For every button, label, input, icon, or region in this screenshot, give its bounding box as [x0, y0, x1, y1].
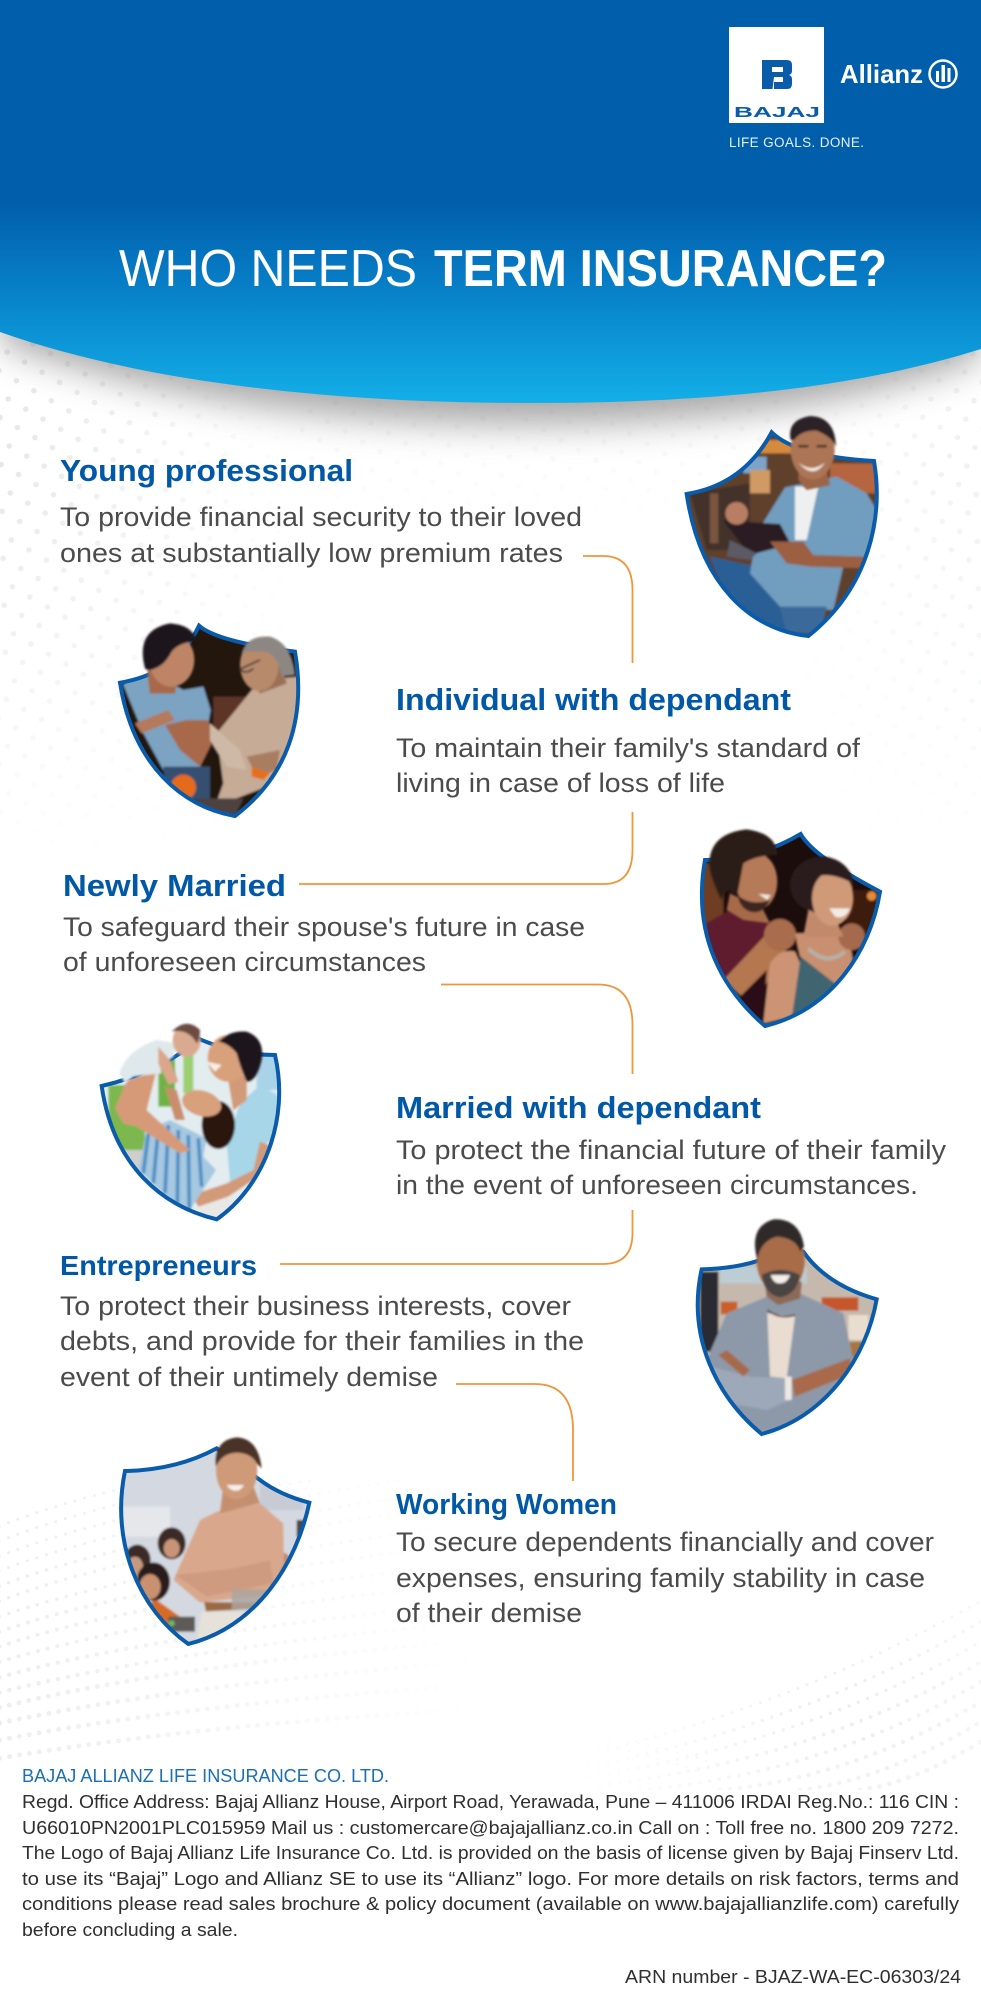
description: in the event of unforeseen circumstances. [396, 1170, 918, 1200]
description: To safeguard their spouse's future in case [63, 912, 585, 942]
section: Married with dependant [396, 1090, 947, 1200]
section: Individual with dependant [396, 682, 861, 798]
description: debts, and provide for their families in the [60, 1326, 584, 1356]
footer: ARN number: ARN number - BJAZ-WA-EC-06303/24 [625, 1967, 961, 1987]
scene background and body [700, 1255, 874, 1432]
heads [143, 623, 295, 693]
description: To secure dependents financially and cover [396, 1527, 934, 1557]
description [396, 1135, 947, 1200]
section: Newly Married: Newly Married [63, 868, 286, 903]
header panel [0, 0, 981, 403]
scene background and bodies [104, 1042, 278, 1217]
section: Newly Married [63, 868, 585, 977]
wordmark: BAJAJ: BAJAJ [734, 104, 820, 121]
description: To protect the financial future of their family [396, 1135, 947, 1165]
section: Individual with dependant: Individual with dependant [396, 682, 791, 717]
connector arrow 5 [456, 1384, 573, 1481]
title [119, 240, 887, 298]
icon: Allianz eagle roundel [930, 60, 956, 88]
photo shield: working women [117, 1437, 313, 1647]
connector arrow 2 [299, 812, 632, 884]
head [755, 1219, 805, 1305]
description [396, 733, 861, 798]
description [60, 502, 582, 568]
photo shield: entrepreneurs [693, 1219, 880, 1437]
head [216, 1437, 262, 1513]
scene background and bodies [704, 836, 878, 1024]
connector arrow 4 [280, 1210, 632, 1264]
section: Young professional [60, 453, 582, 568]
footer: legal disclaimer: Regd. Office Address: Bajaj Allianz House, Airport Road, Yerawada, Pune – 411006 IRDAI Reg.No.: 116 CIN : [22, 1792, 959, 1812]
title: TERM INSURANCE? [434, 240, 887, 298]
section: Married with dependant: Married with dependant [396, 1090, 761, 1125]
shield outline [102, 1039, 279, 1219]
connector arrow 1 [583, 556, 632, 663]
description: To maintain their family's standard of [396, 733, 861, 763]
footer: legal disclaimer: to use its “Bajaj” Logo and Allianz SE to use its “Allianz” logo. For more details on risk factors, terms and [22, 1869, 959, 1889]
description: living in case of loss of life [396, 768, 725, 798]
head [790, 416, 836, 490]
baby and father head [119, 1024, 262, 1110]
photo shield: newly married [693, 829, 887, 1030]
shield outline [687, 432, 877, 636]
title: WHO NEEDS [119, 240, 417, 298]
scene background and body [123, 1450, 307, 1642]
header shadow [0, 300, 981, 424]
section: Entrepreneurs: Entrepreneurs [60, 1250, 257, 1281]
footer: company name: BAJAJ ALLIANZ LIFE INSURANCE CO. LTD. [22, 1765, 389, 1786]
section: Entrepreneurs [60, 1250, 584, 1392]
shield outline [702, 834, 880, 1026]
description [60, 1291, 584, 1392]
connector arrow 3 [441, 984, 632, 1074]
footer: legal disclaimer: conditions please read sales brochure & policy document (available on www.bajajallianzlife.com) carefully [22, 1894, 959, 1914]
photo shield: married with dependant [97, 1024, 287, 1223]
scene background and body [689, 436, 875, 634]
logo: Allianz: Allianz [840, 59, 923, 89]
description: of their demise [396, 1598, 582, 1628]
section: Working Women: Working Women [396, 1489, 617, 1521]
logo: Bajaj [729, 27, 824, 123]
description: To provide financial security to their loved [60, 502, 582, 532]
shield outline [698, 1252, 877, 1434]
footer: legal disclaimer [22, 1792, 959, 1940]
photo shield: young professional [680, 416, 887, 643]
description: of unforeseen circumstances [63, 947, 426, 977]
tagline: LIFE GOALS. DONE. [729, 135, 864, 150]
heads [709, 829, 853, 937]
icon: Bajaj B mark [762, 60, 792, 89]
description: event of their untimely demise [60, 1362, 438, 1392]
shield outline [121, 1448, 309, 1644]
shield outline [120, 626, 298, 816]
footer: legal disclaimer: The Logo of Bajaj Allianz Life Insurance Co. Ltd. is provided on the basis of license given by Bajaj Finserv Ltd. [22, 1843, 959, 1863]
description [396, 1527, 934, 1628]
dotted wave background, lower left [0, 1489, 274, 1760]
description: ones at substantially low premium rates [60, 538, 563, 568]
photo shield: individual with dependant [113, 620, 303, 820]
section: Young professional: Young professional [60, 453, 353, 488]
description: expenses, ensuring family stability in case [396, 1563, 925, 1593]
footer: legal disclaimer: U66010PN2001PLC015959 Mail us : customercare@bajajallianz.co.in Call on : Toll free no. 1800 209 7272. [22, 1818, 959, 1838]
dotted wave background, lower right [684, 1601, 981, 1790]
footer: legal disclaimer: before concluding a sale. [22, 1920, 238, 1940]
section: Working Women [396, 1489, 934, 1628]
dotted background pattern, upper [0, 342, 981, 730]
description: To protect their business interests, cover [60, 1291, 571, 1321]
scene background and bodies [122, 628, 296, 814]
description [63, 912, 585, 977]
